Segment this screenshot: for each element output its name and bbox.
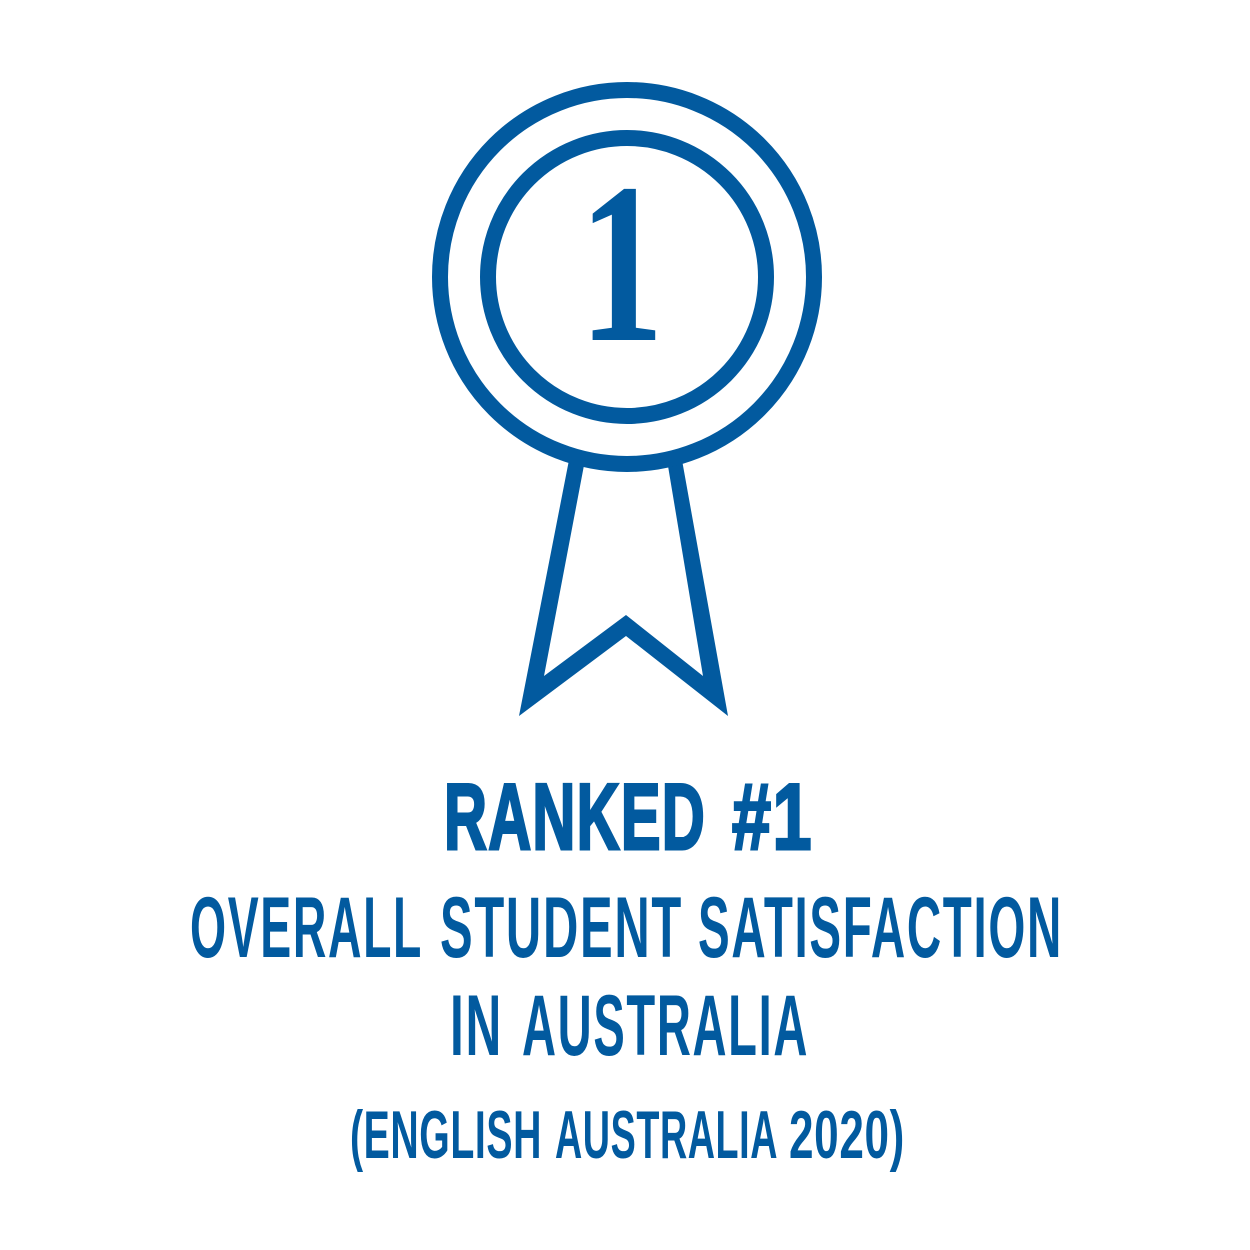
icon: inner ring [488, 138, 766, 416]
text: in australia [450, 978, 809, 1074]
heading: ranked #1: #1 [732, 764, 813, 869]
text: overall student satisfaction: STUDENT [440, 880, 683, 976]
text: in australia: IN [450, 978, 503, 1074]
text: overall student satisfaction: OVERALL [190, 880, 423, 976]
text: source [350, 1097, 905, 1173]
icon: ribbon tails [519, 460, 728, 716]
text: source: 2020) [789, 1097, 905, 1173]
icon: numeral 1: 1 [579, 136, 664, 390]
icon: award rosette [440, 90, 814, 716]
text: in australia: AUSTRALIA [522, 978, 809, 1074]
text: source: AUSTRALIA [555, 1097, 778, 1173]
text: source: (ENGLISH [350, 1097, 542, 1173]
heading: ranked #1: RANKED [444, 764, 706, 869]
text: overall student satisfaction [190, 880, 1063, 976]
icon: outer ring [440, 90, 814, 464]
